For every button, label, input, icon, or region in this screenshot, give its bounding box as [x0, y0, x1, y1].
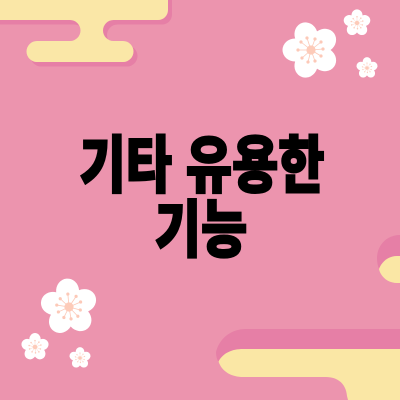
- flower: right small: [355, 57, 379, 79]
- cloud: top left shadow: [0, 0, 172, 66]
- cloud: right edge shadow: [377, 235, 400, 275]
- cloud: top left: [0, 0, 168, 62]
- cloud: right edge: [379, 256, 400, 283]
- cloud: bottom right shadow: [216, 329, 400, 380]
- flower: bottom left large: [36, 276, 102, 339]
- flower: bottom small: [68, 347, 92, 369]
- flower: top right small: [342, 9, 372, 37]
- title: [80, 131, 324, 265]
- title: 기능: [155, 195, 247, 265]
- flower: top right large: [282, 19, 341, 81]
- cloud: bottom right: [218, 349, 400, 400]
- flower: bottom left small: [20, 333, 50, 362]
- title: 기타 유용한: [80, 131, 324, 200]
